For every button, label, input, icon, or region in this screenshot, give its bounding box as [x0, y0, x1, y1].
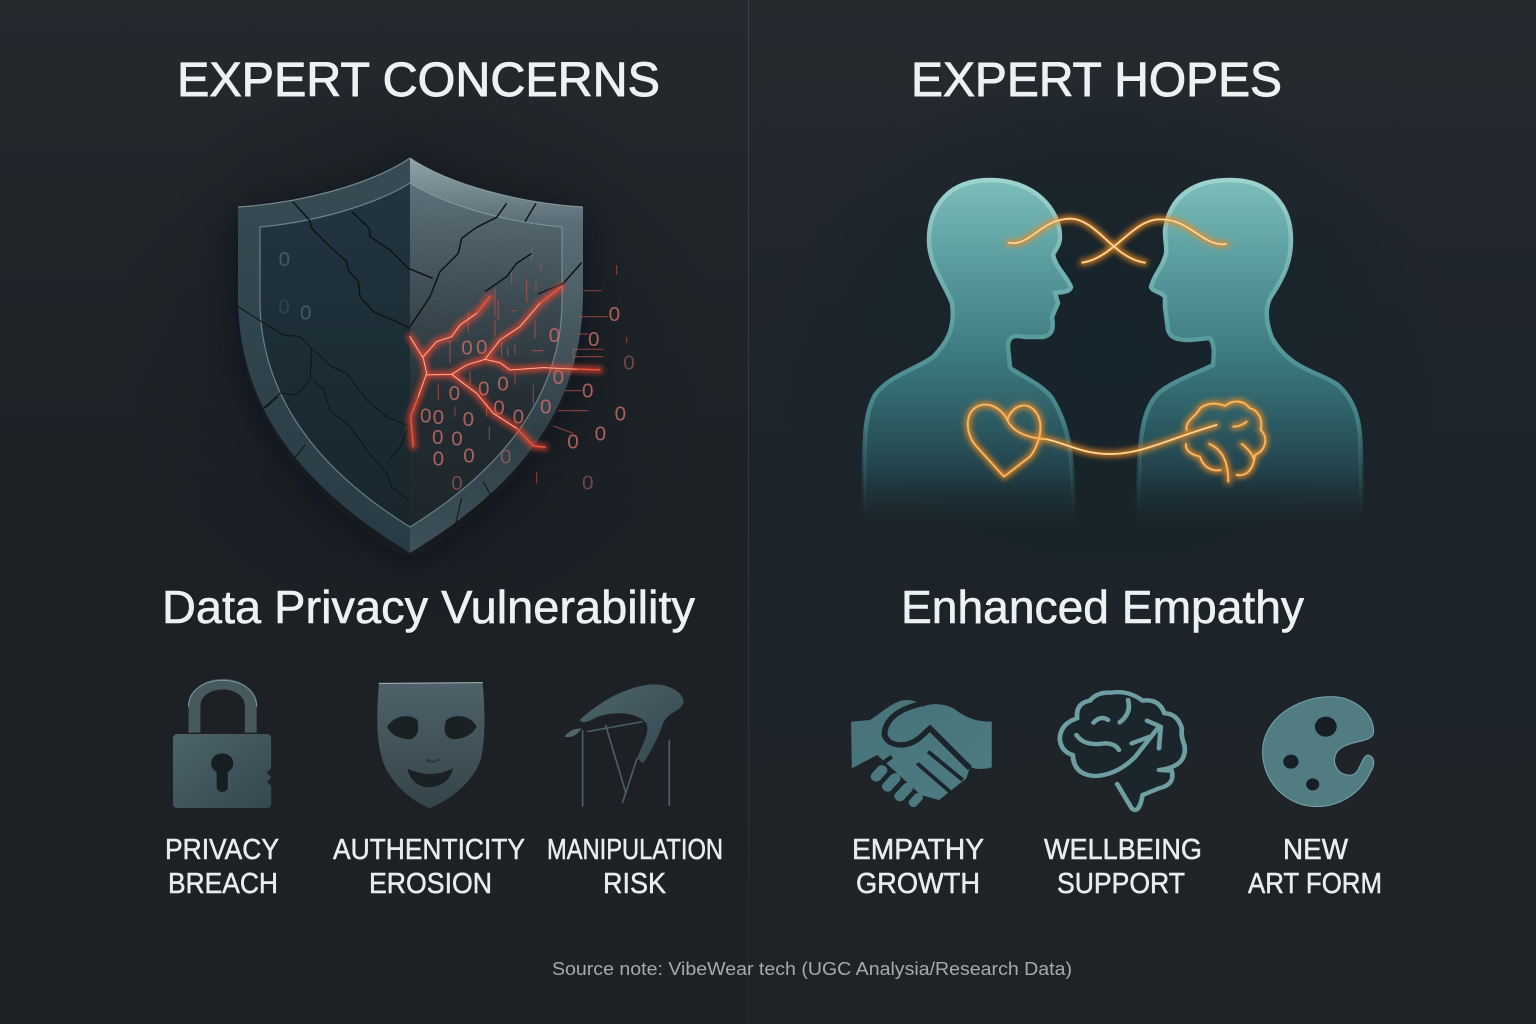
icon: brain with growth arrow — [1060, 692, 1185, 810]
binary digits: 0 — [497, 373, 509, 396]
binary digits: 0 — [432, 426, 443, 449]
icon: puppet hand and strings — [565, 684, 684, 807]
illustration: two connected people — [864, 180, 1362, 525]
subheading: enhanced empathy: Enhanced Empathy — [901, 581, 1304, 633]
label: privacy breach: PRIVACY — [165, 834, 279, 866]
icon: paint palette — [1263, 697, 1374, 807]
binary digits: 0 — [553, 366, 564, 389]
label: wellbeing support: SUPPORT — [1057, 868, 1185, 900]
binary digits: 0 — [433, 447, 444, 470]
binary digits — [278, 247, 635, 495]
binary digits: 0 — [493, 397, 505, 420]
label: wellbeing support: WELLBEING — [1044, 834, 1202, 866]
dark cracks — [238, 202, 582, 527]
label: manipulation risk: MANIPULATION — [547, 834, 723, 866]
binary digits: 0 — [463, 445, 475, 468]
binary digits: 0 — [278, 295, 290, 318]
label: empathy growth — [852, 834, 984, 900]
label: authenticity erosion: EROSION — [369, 868, 492, 900]
binary digits: 0 — [500, 445, 511, 468]
label: privacy breach: BREACH — [168, 868, 278, 900]
binary digits: 0 — [623, 351, 635, 374]
binary digits: 0 — [588, 328, 599, 351]
illustration: cracked shield with leaking binary — [238, 158, 635, 562]
binary digits: 0 — [433, 406, 444, 429]
source note: Source note: VibeWear tech (UGC Analysia/Research Data) — [552, 959, 1072, 979]
glowing connection lines — [968, 219, 1265, 482]
heading: expert concerns: EXPERT CONCERNS — [177, 54, 660, 107]
binary digits: 0 — [582, 379, 593, 402]
icon: padlock — [173, 680, 271, 808]
label: wellbeing support — [1044, 834, 1202, 900]
binary digits: 0 — [595, 423, 606, 446]
binary digits: 0 — [615, 403, 626, 426]
label: manipulation risk — [547, 834, 723, 900]
binary digits: 0 — [476, 336, 487, 359]
binary digits: 0 — [449, 382, 460, 405]
label: manipulation risk: RISK — [603, 868, 667, 900]
icon: theatre mask — [377, 683, 484, 808]
label: authenticity erosion: AUTHENTICITY — [333, 834, 525, 866]
person right — [1137, 180, 1362, 525]
binary digits: 0 — [567, 431, 579, 454]
binary digits: 0 — [451, 427, 463, 450]
label: authenticity erosion — [333, 834, 525, 900]
binary digits: 0 — [549, 324, 560, 347]
label: new art form: NEW — [1283, 834, 1349, 866]
binary digits: 0 — [582, 471, 593, 494]
person left — [864, 180, 1075, 525]
binary digits: 0 — [461, 337, 473, 360]
binary digits: 0 — [463, 408, 474, 431]
label: empathy growth: GROWTH — [856, 868, 980, 900]
panel: concerns background — [0, 0, 748, 1024]
panel: hopes background — [748, 0, 1536, 1024]
binary digits: 0 — [609, 303, 620, 326]
glowing red fracture — [410, 287, 600, 447]
label: new art form — [1248, 834, 1382, 900]
binary digits: 0 — [300, 301, 311, 324]
label: privacy breach — [165, 834, 279, 900]
binary digits: 0 — [540, 395, 551, 418]
binary digits: 0 — [451, 472, 463, 495]
subheading: data privacy vulnerability: Data Privacy Vulnerability — [162, 581, 695, 633]
binary digits: 0 — [513, 405, 524, 428]
binary digits: 0 — [279, 248, 290, 271]
icon: handshake — [851, 700, 992, 809]
binary digits: 0 — [478, 377, 489, 400]
shield frame — [238, 158, 410, 553]
label: new art form: ART FORM — [1248, 868, 1382, 900]
heading: expert hopes: EXPERT HOPES — [911, 54, 1282, 107]
shield face — [260, 183, 410, 527]
binary digits: 0 — [420, 405, 431, 428]
label: empathy growth: EMPATHY — [852, 834, 984, 866]
